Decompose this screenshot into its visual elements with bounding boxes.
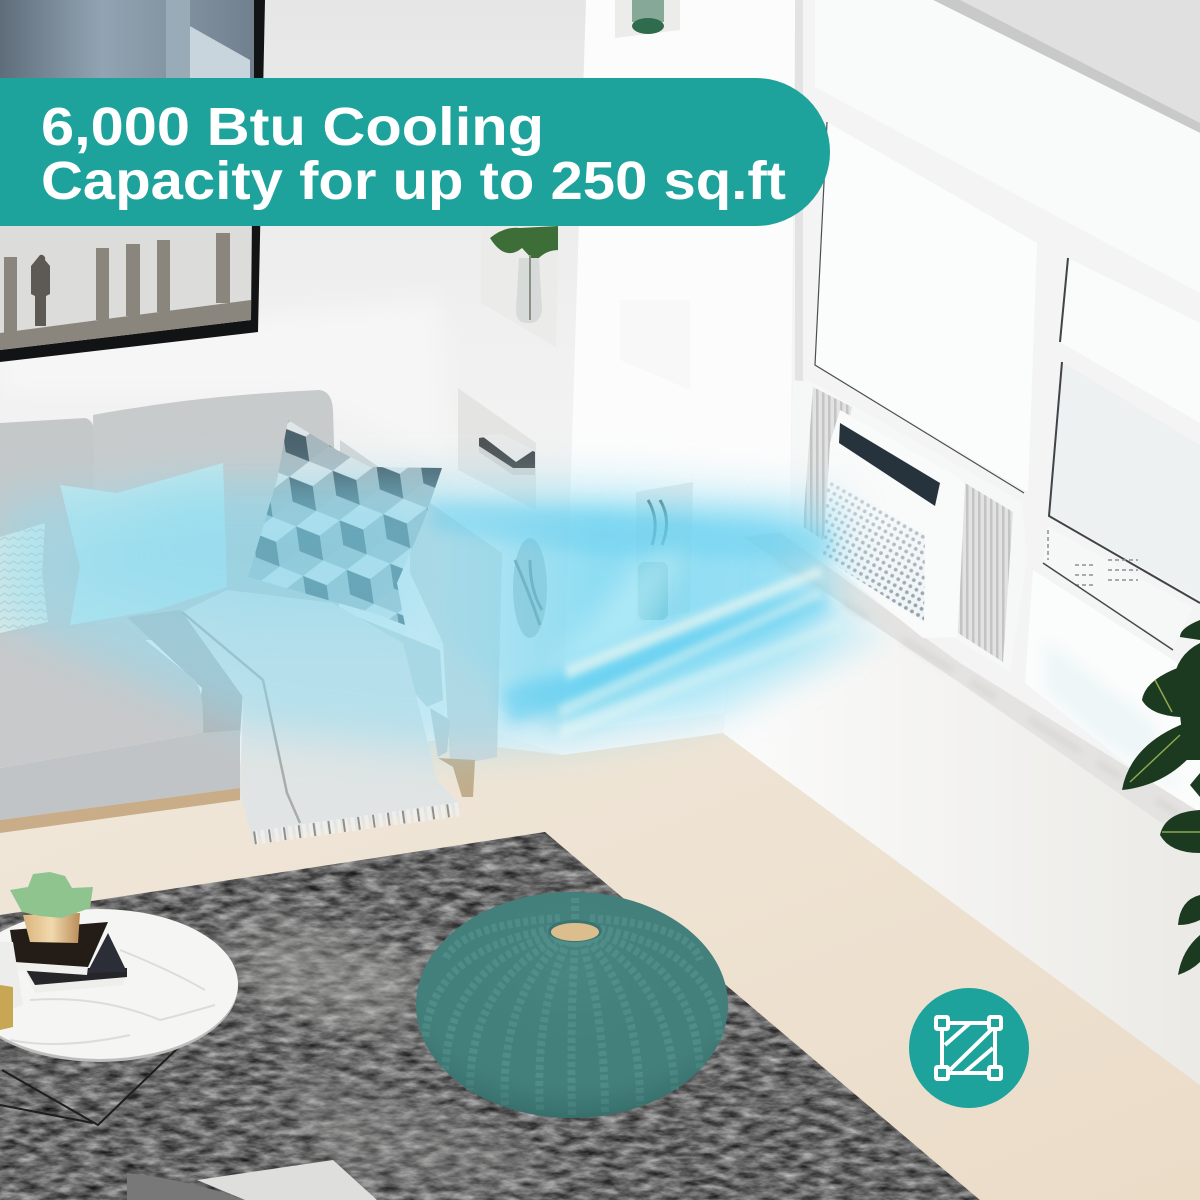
gold candle xyxy=(0,985,13,1030)
right back cushion xyxy=(93,390,340,640)
blanket xyxy=(182,590,462,840)
top right pane xyxy=(1060,258,1200,423)
right louver xyxy=(958,483,1013,662)
shelf niche: books xyxy=(458,388,536,510)
sofa base xyxy=(0,730,240,820)
cube pillow xyxy=(248,420,442,625)
floor xyxy=(0,733,1200,1200)
heading: 6,000 Btu Cooling xyxy=(41,97,544,157)
left louver xyxy=(803,387,852,540)
seat left cushion xyxy=(0,622,203,768)
picture xyxy=(0,0,265,362)
lower right pane xyxy=(1025,570,1200,822)
unit body xyxy=(823,410,965,638)
leaf veins xyxy=(1130,680,1200,832)
seat middle xyxy=(127,610,243,737)
front grille xyxy=(823,477,925,622)
sofa xyxy=(0,390,502,833)
arm xyxy=(340,440,502,761)
bottom cushion xyxy=(127,1160,377,1200)
banner xyxy=(0,78,830,226)
window frame base xyxy=(790,0,1200,830)
unit surround xyxy=(790,380,1027,672)
window sill xyxy=(743,532,1200,842)
plant xyxy=(1122,620,1200,975)
arched wall decor xyxy=(620,300,690,390)
heading: Capacity for up to 250 sq.ft xyxy=(41,151,786,211)
shelf niche: tall vase xyxy=(636,482,693,622)
top glass xyxy=(815,0,1200,293)
bright wall beside column xyxy=(562,0,800,755)
books xyxy=(10,922,127,993)
blanket fringe xyxy=(254,809,461,838)
top wall strip xyxy=(933,0,1200,133)
round wall decor xyxy=(513,538,547,638)
coffee table xyxy=(0,872,238,1125)
air conditioner xyxy=(790,380,1027,672)
white candle xyxy=(0,942,23,1012)
shelf niche: vase with leaves xyxy=(481,226,559,347)
shelves and decor xyxy=(458,0,693,638)
pouf xyxy=(416,892,728,1118)
small pillow xyxy=(0,523,48,633)
vertical frame xyxy=(795,0,803,540)
left back cushion xyxy=(0,418,98,650)
window xyxy=(790,0,1200,830)
sofa leg xyxy=(438,758,475,797)
blinds pane xyxy=(1043,527,1193,647)
shelf niche: top plant xyxy=(615,0,680,38)
seat right xyxy=(340,610,443,707)
leaves xyxy=(1122,620,1200,975)
rug xyxy=(0,832,980,1200)
airflow xyxy=(0,480,890,750)
baseboard xyxy=(445,690,723,755)
lower wall left of column xyxy=(0,300,445,460)
middle right pane xyxy=(1049,362,1200,600)
wood rail xyxy=(0,788,240,833)
right wall under window xyxy=(723,537,1200,1085)
icon: area square xyxy=(909,988,1029,1108)
succulent xyxy=(10,872,93,943)
lower seat right xyxy=(430,708,450,757)
light pillow xyxy=(60,463,227,625)
left pane xyxy=(815,122,1037,492)
top vent xyxy=(839,423,940,506)
